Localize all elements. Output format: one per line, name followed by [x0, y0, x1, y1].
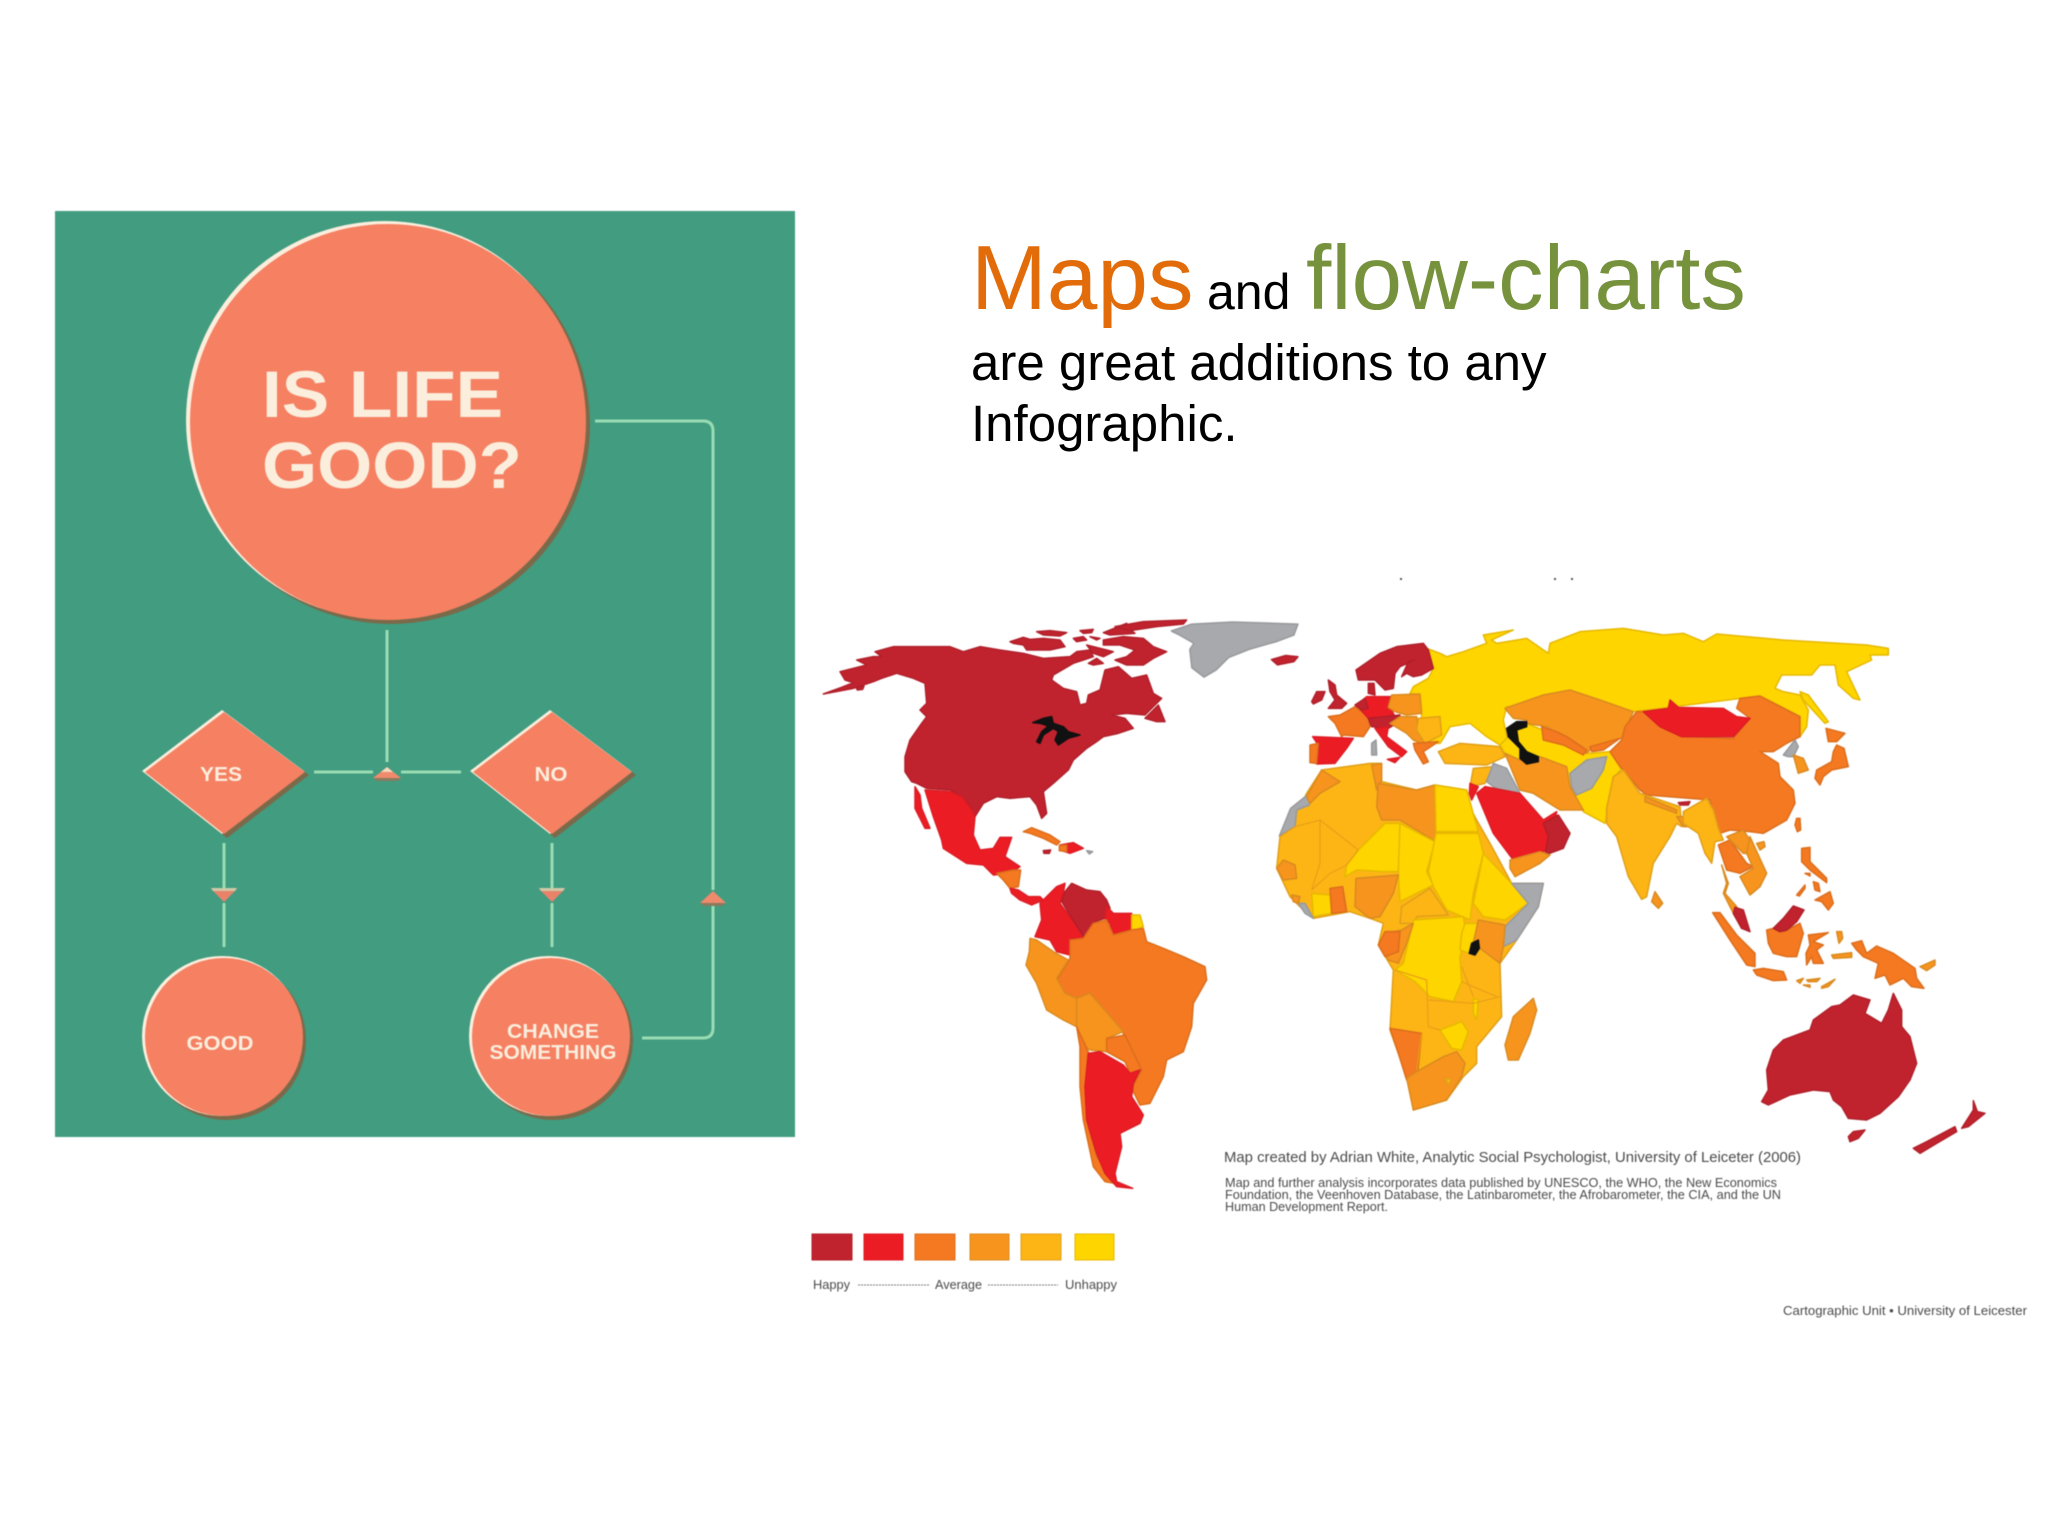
map: indonesia and oceania — [1713, 906, 1985, 1153]
subtitle line one: are great additions to any — [971, 334, 1547, 391]
southeast asia mainland and east asian islands — [1683, 728, 1848, 932]
south asia — [1607, 770, 1697, 908]
map legend — [812, 1234, 1118, 1292]
map: africa — [1277, 763, 1543, 1110]
china — [1610, 696, 1800, 833]
stray map marks — [1400, 578, 1573, 580]
map: north and central america — [823, 620, 1187, 905]
title word: and: and — [1207, 264, 1290, 320]
mexico and central america — [915, 787, 1093, 905]
map legend: Happy — [813, 1278, 851, 1292]
cartographic credit: Cartographic Unit • University of Leicester — [1783, 1304, 2027, 1318]
outcome: good: GOOD — [186, 1033, 254, 1055]
map: greenland and iceland — [1171, 622, 1298, 677]
decision: yes — [142, 710, 309, 838]
title word: flow-charts: flow-charts — [1306, 228, 1746, 329]
new zealand — [1913, 1127, 1957, 1153]
map: eurasia — [1310, 628, 1888, 932]
flow chart background — [55, 211, 795, 1137]
africa borders — [1280, 820, 1500, 1070]
outcome: change something: CHANGE — [507, 1021, 599, 1043]
map credit: Map and further analysis incorporates data published by UNESCO, the WHO, the New Economics — [1225, 1176, 1777, 1190]
heading: is life good text: IS LIFE — [262, 357, 503, 431]
subtitle line two: Infographic. — [971, 395, 1238, 452]
arrow: centre junction — [373, 767, 401, 781]
map credit — [1224, 1149, 1801, 1214]
arrow: no down — [539, 888, 565, 902]
arrow: yes down — [211, 888, 237, 902]
decision: yes: YES — [200, 764, 242, 786]
decision: no — [470, 710, 636, 838]
heading: maps and flow-charts — [971, 228, 1746, 452]
outcome: good — [142, 956, 306, 1120]
mongolia — [1643, 700, 1750, 737]
russia and eastern europe — [1410, 628, 1888, 823]
heading: is life good text: GOOD? — [262, 428, 522, 502]
outcome: change something — [469, 956, 633, 1120]
middle east — [1438, 743, 1583, 877]
great lakes — [1033, 717, 1080, 745]
map credit: Foundation, the Veenhoven Database, the Latinbarometer, the Afrobarometer, the CIA, and the UN — [1225, 1188, 1781, 1202]
connector lines — [224, 421, 713, 1038]
map credit: Map created by Adrian White, Analytic Social Psychologist, University of Leiceter (2006) — [1224, 1149, 1801, 1166]
decision: no: NO — [534, 764, 568, 786]
outcome: change something: SOMETHING — [490, 1042, 616, 1064]
central asia — [1505, 690, 1633, 795]
map credit: Human Development Report. — [1225, 1200, 1388, 1214]
north america — [823, 620, 1187, 818]
australia — [1762, 993, 1917, 1120]
map legend: Average — [935, 1278, 982, 1292]
decision: is life good — [186, 221, 590, 624]
heading: is life good text — [262, 357, 522, 502]
arrow: loop up — [700, 891, 726, 906]
europe — [1310, 643, 1442, 764]
map legend: Unhappy — [1065, 1278, 1118, 1292]
title word: maps: Maps — [971, 228, 1194, 329]
map: south america — [1026, 883, 1207, 1188]
